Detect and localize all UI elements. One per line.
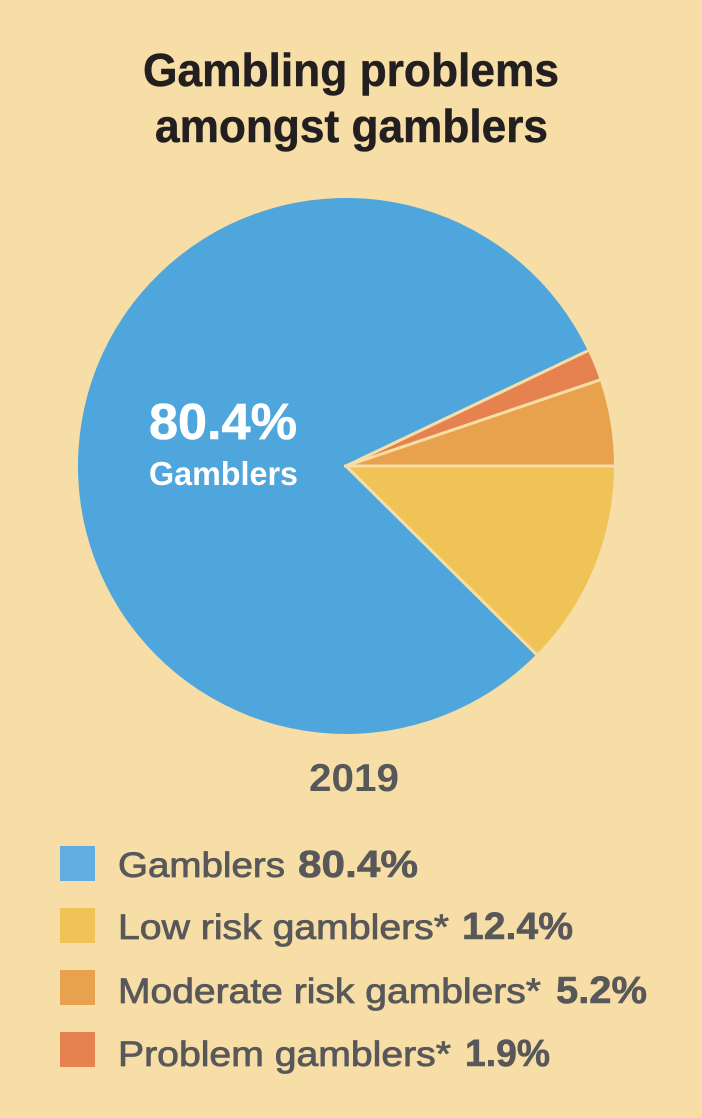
slice: problem gamblers 1.9% [346, 351, 600, 466]
pie label: gamblers: Gamblers [149, 455, 298, 492]
legend item: moderate risk gamblers [60, 970, 647, 1012]
pie chart [78, 198, 615, 734]
legend item: moderate risk gamblers: 5.2% [556, 970, 647, 1012]
legend item: gamblers: Gamblers [118, 846, 285, 885]
legend [60, 844, 647, 1075]
legend item: gamblers: 80.4% [298, 844, 418, 886]
legend item: moderate risk gamblers: Moderate risk gamblers* [118, 972, 541, 1011]
slice: moderate risk gamblers 5.2% [346, 380, 614, 466]
slice: low risk gamblers 12.4% [346, 466, 614, 654]
legend item: low risk gamblers [60, 906, 573, 948]
legend item: problem gamblers: Problem gamblers* [118, 1035, 451, 1074]
title: Gambling problems [143, 44, 559, 96]
pie label: gamblers [149, 393, 298, 492]
legend item: problem gamblers: 1.9% [465, 1033, 550, 1075]
legend item: gamblers [60, 844, 418, 886]
legend item: low risk gamblers: 12.4% [462, 906, 573, 948]
year label: 2019 [309, 757, 399, 800]
legend item: problem gamblers [60, 1032, 550, 1075]
title: amongst gamblers [155, 100, 548, 152]
pie label: gamblers: 80.4% [149, 393, 297, 450]
slice: gamblers 80.4% [78, 198, 588, 734]
title [143, 44, 559, 152]
legend item: low risk gamblers: Low risk gamblers* [118, 908, 449, 947]
